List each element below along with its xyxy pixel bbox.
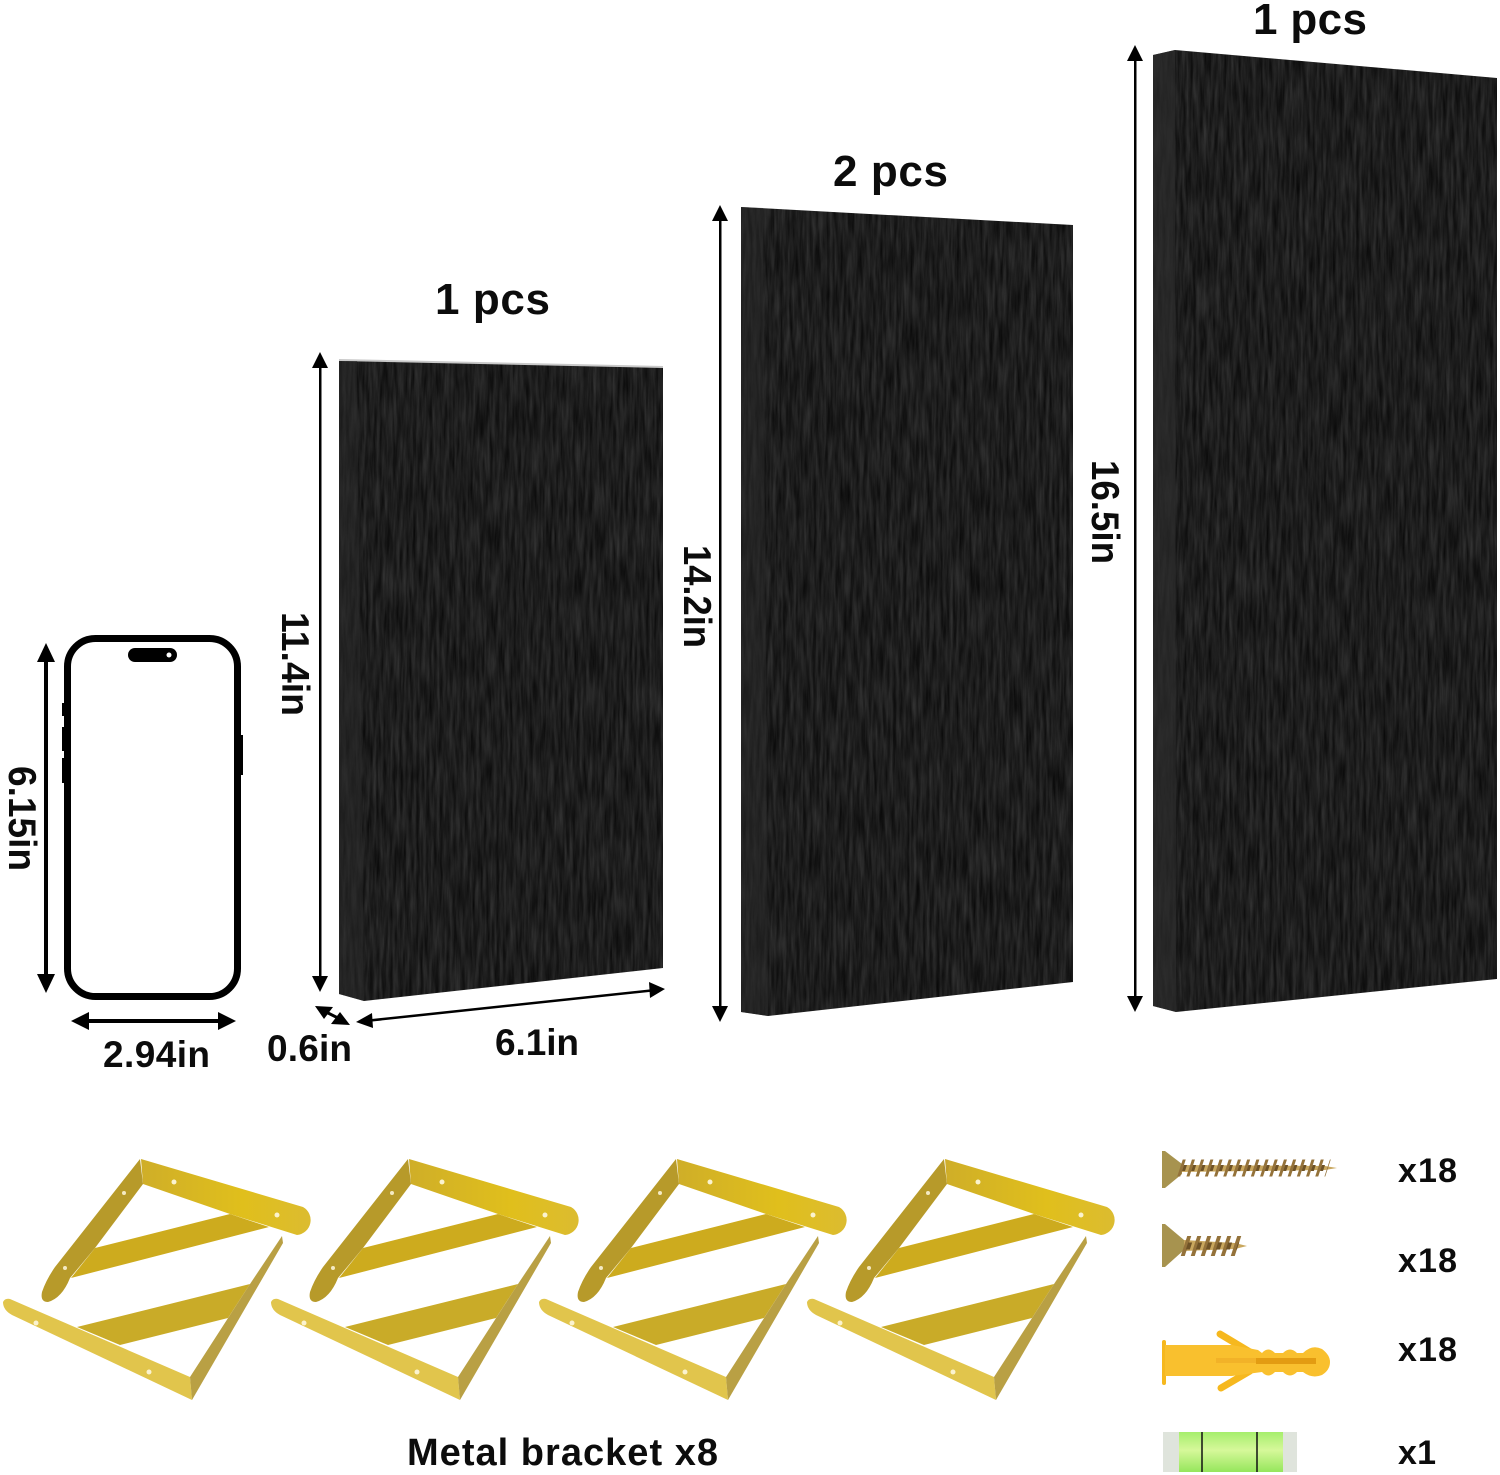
icon: short screw (1162, 1224, 1247, 1267)
quantity: long screws: x18 (1398, 1152, 1457, 1190)
label: 1 pcs small board: 1 pcs (435, 275, 550, 324)
dimension: 11.4in: 11.4in (273, 612, 316, 716)
arrow: thickness 0.6in (315, 1006, 350, 1025)
dimension: 16.5in: 16.5in (1083, 460, 1126, 564)
dimension: 6.15in: 6.15in (0, 766, 43, 871)
icon: long screw (1162, 1151, 1337, 1188)
arrow: small board width (356, 982, 665, 1028)
label: 2 pcs medium board: 2 pcs (833, 147, 948, 196)
metal bracket pair 3 (539, 1159, 847, 1400)
arrow: phone width (71, 1012, 236, 1030)
quantity: short screws: x18 (1398, 1242, 1457, 1280)
arrow: medium board height (712, 205, 728, 1022)
metal bracket pair 1 (3, 1159, 311, 1400)
quantity: level: x1 (1398, 1434, 1436, 1472)
dimension: 2.94in: 2.94in (103, 1034, 210, 1075)
medium black wood board (741, 207, 1073, 1016)
icon: bubble level (1163, 1432, 1297, 1472)
arrow: small board height (312, 352, 328, 992)
icon: yellow wall anchor (1162, 1334, 1330, 1388)
arrow: phone height (37, 643, 55, 993)
metal bracket pair 2 (271, 1159, 579, 1400)
arrow: large board height (1127, 45, 1143, 1012)
small black wood board (339, 359, 663, 1001)
large black wood board (1153, 50, 1497, 1012)
dimension: 14.2in: 14.2in (675, 545, 718, 648)
dimension: 6.1in: 6.1in (495, 1022, 579, 1063)
dimension: 0.6in: 0.6in (267, 1028, 352, 1069)
quantity: anchors: x18 (1398, 1331, 1457, 1369)
icon: phone outline (62, 638, 243, 996)
caption: metal bracket x8: Metal bracket x8 (407, 1432, 718, 1474)
metal bracket pair 4 (807, 1159, 1115, 1400)
